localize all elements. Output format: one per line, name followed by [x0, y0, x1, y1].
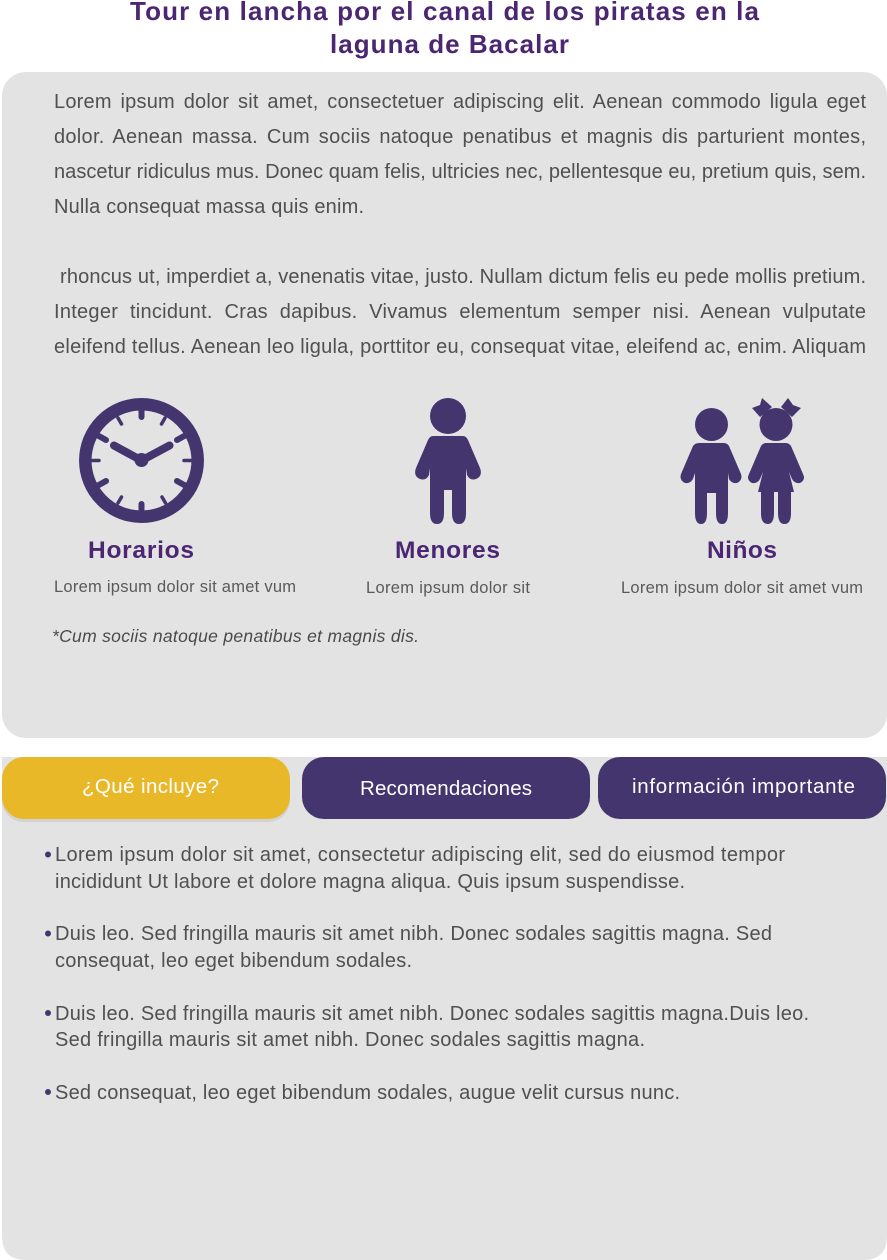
list item 2: Duis leo. Sed fringilla mauris sit amet nibh. Donec sodales sagittis magna. Sed [55, 923, 772, 945]
list item 1: Lorem ipsum dolor sit amet, consectetur adipiscing elit, sed do eiusmod tempor [55, 844, 785, 866]
panel: tour details [2, 72, 887, 738]
tab: ¿Qué incluye? [2, 757, 290, 822]
icon: child [415, 398, 481, 524]
list item 3: Duis leo. Sed fringilla mauris sit amet nibh. Donec sodales sagittis magna.Duis leo. [55, 1003, 809, 1025]
heading: Niños: Niños [707, 537, 777, 564]
text block: intro paragraph: Nulla consequat massa quis enim. [54, 196, 364, 218]
tab: información importante [598, 757, 886, 819]
tab: ¿Qué incluye?: ¿Qué incluye? [82, 775, 219, 798]
text block: second paragraph: Integer tincidunt. Cras dapibus. Vivamus elementum semper nisi. Aenean vulputate [54, 301, 866, 323]
tab: Recomendaciones [302, 757, 590, 819]
tab: información importante: información importante [632, 775, 855, 798]
list item 1: incididunt Ut labore et dolore magna aliqua. Quis ipsum suspendisse. [55, 871, 685, 893]
text block: intro paragraph: dolor. Aenean massa. Cum sociis natoque penatibus et magnis dis parturient montes, [54, 126, 866, 148]
list item 4: Sed consequat, leo eget bibendum sodales, augue velit cursus nunc. [55, 1082, 680, 1104]
title: laguna de Bacalar [330, 29, 569, 59]
list item 3 [45, 1003, 809, 1051]
title [130, 0, 760, 59]
heading: Horarios: Horarios [88, 537, 194, 564]
icon: clock [85, 404, 198, 517]
caption: Niños: Lorem ipsum dolor sit amet vum [621, 579, 863, 597]
list item 3: Sed fringilla mauris sit amet nibh. Donec sodales sagittis magna. [55, 1029, 645, 1051]
list item 2 [45, 923, 772, 972]
icon: boy and girl [680, 398, 804, 524]
text block: intro paragraph: Lorem ipsum dolor sit amet, consectetuer adipiscing elit. Aenean commodo ligula eget [54, 91, 866, 113]
heading: Menores: Menores [395, 537, 500, 564]
text block: second paragraph: eleifend tellus. Aenean leo ligula, porttitor eu, consequat vitae, eleifend ac, enim. Aliquam [54, 336, 866, 358]
caption: Menores: Lorem ipsum dolor sit [366, 579, 530, 597]
list item 2: consequat, leo eget bibendum sodales. [55, 950, 412, 972]
footnote: *Cum sociis natoque penatibus et magnis dis. [52, 626, 419, 646]
text block: intro paragraph [54, 91, 866, 218]
text block: second paragraph: rhoncus ut, imperdiet a, venenatis vitae, justo. Nullam dictum felis eu pede mollis pretium. [60, 266, 866, 288]
caption: Horarios: Lorem ipsum dolor sit amet vum [54, 578, 296, 596]
tab: Recomendaciones: Recomendaciones [360, 777, 532, 800]
list item 1 [45, 844, 785, 893]
panel: included items [2, 757, 887, 1260]
text block: intro paragraph: nascetur ridiculus mus. Donec quam felis, ultricies nec, pellentesque eu, pretium quis, sem. [54, 161, 866, 183]
text block: second paragraph [54, 266, 866, 358]
